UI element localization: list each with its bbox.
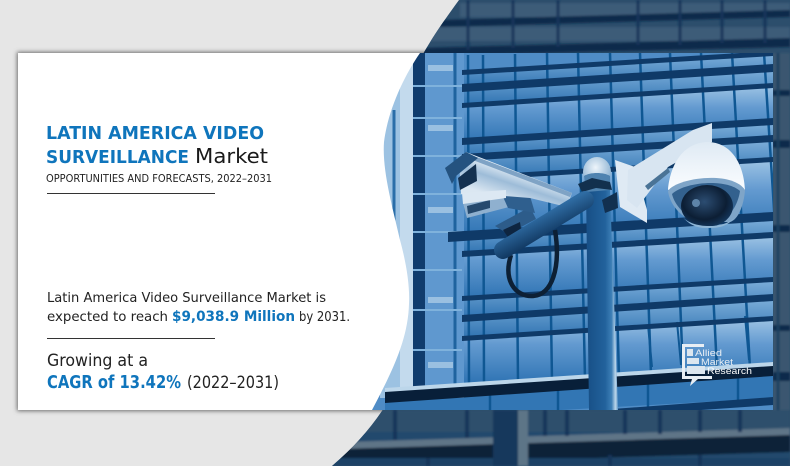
building facade panes [370,53,773,420]
CAGR statement [47,351,279,393]
Allied Market Research logo: Market [701,357,734,367]
horizontal beams [448,53,773,410]
white text panel [18,53,420,410]
CAGR statement: CAGR of 13.42% [47,373,181,393]
title: SURVEILLANCE [46,148,189,168]
vertical mullions [468,53,784,418]
title: Market [195,144,268,168]
market size statement: $9,038.9 Million [172,309,295,325]
market size statement [47,291,350,325]
market size statement: expected to reach [47,310,168,325]
market size statement: by 2031. [299,310,350,325]
dark tinted building backdrop [330,0,790,466]
arm tube [503,200,585,250]
Allied Market Research logo: Research [707,366,752,377]
CAGR statement: Growing at a [47,351,148,370]
CAGR statement: (2022–2031) [187,373,279,392]
white panel shadow [17,52,437,411]
market size statement: Latin America Video Surveillance Market is [47,291,326,306]
photo: building facade with surveillance cameras [370,51,784,432]
left tower column [380,53,464,398]
street pole [586,190,618,410]
window ledge [385,362,773,393]
pole lamp [578,157,612,192]
cable loop [508,230,557,296]
dome camera and bracket [602,123,745,228]
title: LATIN AMERICA VIDEO [46,124,264,144]
title [46,124,268,168]
bullet camera [445,152,572,240]
Allied Market Research logo: Allied [695,348,722,358]
subtitle: OPPORTUNITIES AND FORECASTS, 2022–2031 [46,173,272,185]
Allied Market Research logo [682,344,752,386]
